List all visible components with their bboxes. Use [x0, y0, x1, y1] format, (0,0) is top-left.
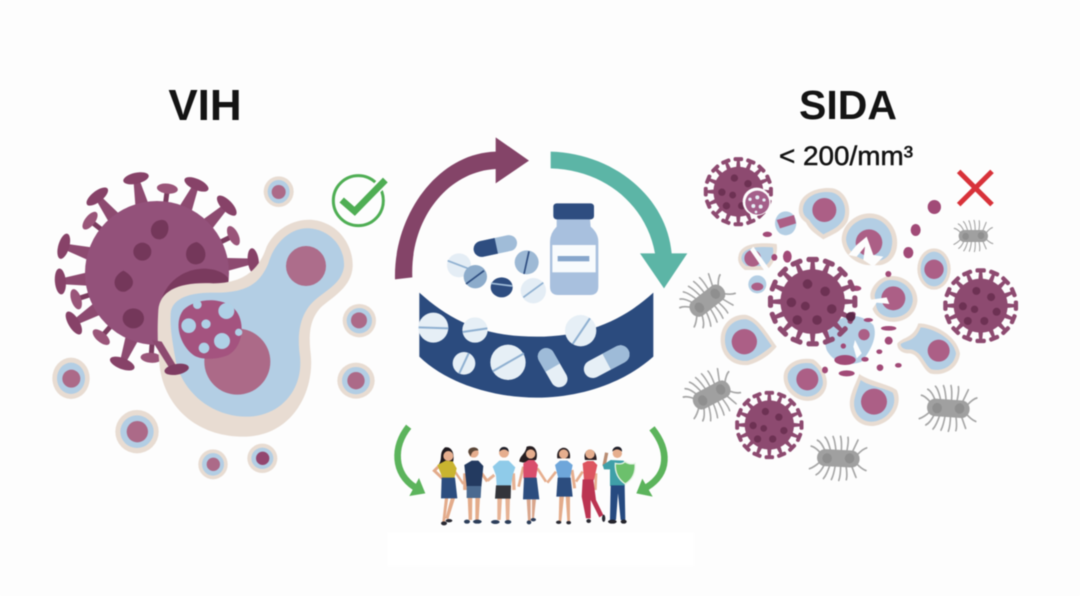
subtitle: CD4 threshold: < 200/mm³ — [779, 141, 913, 171]
icon: shield — [615, 462, 635, 484]
person 3 — [487, 447, 515, 524]
navy band of pills — [418, 293, 653, 398]
white caption area — [387, 533, 694, 566]
person 7 with shield — [603, 447, 635, 524]
cell 11 fragment — [775, 211, 796, 235]
person 2 — [464, 447, 487, 524]
cell 1 — [799, 188, 849, 239]
arrow: green right — [636, 428, 664, 497]
person 1 — [434, 447, 463, 525]
cell 2 — [842, 213, 897, 267]
cell 12 fragment — [748, 275, 766, 293]
arrow: purple — [395, 137, 529, 279]
capsule — [535, 345, 571, 390]
cell 3 — [917, 248, 951, 290]
cell 7 — [850, 374, 899, 426]
bacteria — [672, 220, 993, 482]
central treatment cycle — [395, 137, 687, 398]
person 5 — [547, 448, 575, 524]
icon: large virus — [54, 170, 260, 373]
viruses — [704, 157, 1018, 459]
title: SIDA: SIDA — [799, 82, 897, 128]
medicine bottle — [550, 203, 598, 295]
damaged cells — [721, 188, 960, 426]
people group — [387, 427, 694, 566]
small cells — [52, 176, 376, 479]
arrow: green left — [398, 427, 425, 496]
fragment leaving virus — [743, 188, 771, 216]
cell nucleus — [286, 246, 326, 286]
cell 5 — [721, 315, 777, 365]
person 4 — [519, 446, 546, 524]
loose pills — [447, 234, 546, 303]
cell 6 — [784, 359, 827, 401]
cell cytoplasm — [171, 228, 344, 417]
icon: green check — [333, 176, 385, 226]
debris — [763, 200, 941, 376]
icon: red cross — [959, 171, 992, 205]
cell 8 — [897, 323, 960, 374]
panel: VIH illustration — [52, 170, 385, 479]
cell 4 — [865, 276, 917, 322]
cell 10 fragmented — [738, 243, 777, 272]
cell nucleus lower — [204, 329, 270, 395]
virus fragment inside cell — [179, 300, 242, 359]
title: VIH: VIH — [168, 81, 242, 130]
arrow: teal — [551, 152, 687, 288]
person 6 — [576, 449, 605, 523]
cell 9 fragmented — [825, 316, 875, 365]
virus spike over cell — [152, 340, 190, 377]
cell outer membrane — [158, 220, 353, 437]
panel: SIDA illustration — [672, 157, 1018, 482]
capsule — [581, 342, 633, 381]
